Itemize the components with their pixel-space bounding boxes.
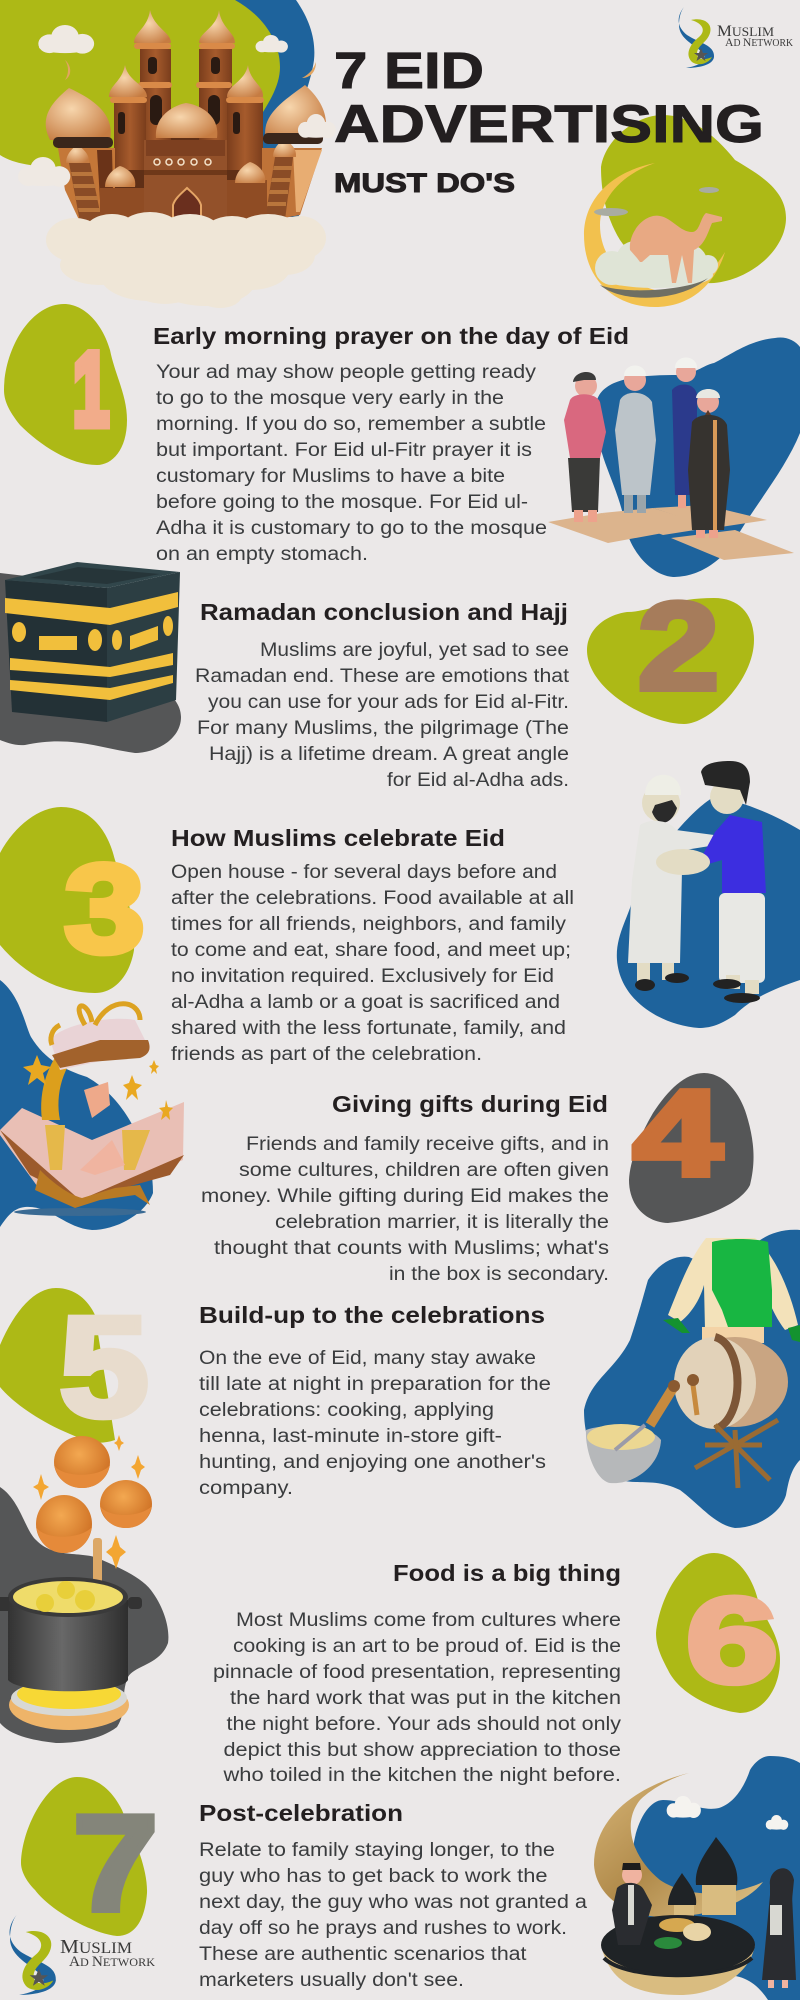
- logo: bottom left: AD NETWORK: [69, 1954, 155, 1970]
- blob: grey 6: [0, 1487, 168, 1743]
- body 5: On the eve of Eid, many stay awake: [199, 1348, 536, 1369]
- logo: top right: AD NETWORK: [725, 35, 794, 49]
- section 7: [10, 1756, 800, 2000]
- striped columns: [69, 157, 293, 222]
- body 7: These are authentic scenarios that: [199, 1944, 527, 1965]
- burner: [9, 1680, 129, 1730]
- illustration: camel on crescent moon: [584, 163, 725, 307]
- body 6: cooking is an art to be proud of. Eid is the: [233, 1636, 621, 1657]
- blob: blue 3: [617, 797, 800, 1028]
- blob: green 7: [21, 1777, 147, 1936]
- section 4: [0, 980, 754, 1285]
- crescent: [41, 1035, 85, 1120]
- body 3: Open house - for several days before and: [171, 862, 557, 883]
- heading 6: Food is a big thing: [393, 1560, 621, 1586]
- header blob: green: [0, 0, 280, 190]
- clouds: [667, 1796, 788, 1830]
- body 2: Hajj) is a lifetime dream. A great angle: [209, 744, 569, 765]
- body 2: Ramadan end. These are emotions that: [195, 666, 570, 687]
- body 3: after the celebrations. Food available at all: [171, 888, 574, 909]
- body 1: morning. If you do so, remember a subtle: [156, 414, 546, 435]
- body 7: [199, 1840, 587, 1991]
- heading 1: Early morning prayer on the day of Eid: [153, 323, 629, 349]
- body 6: who toiled in the kitchen the night before.: [222, 1765, 621, 1786]
- illustration: drum, garment and bowl: [586, 1238, 800, 1488]
- blob: green 5: [0, 1288, 115, 1443]
- body 4: Friends and family receive gifts, and in: [246, 1134, 609, 1155]
- lid: [50, 1019, 150, 1070]
- blob: grey 2: [0, 573, 181, 753]
- body 5: hunting, and enjoying one another's: [199, 1452, 546, 1473]
- heading 7: Post-celebration: [199, 1800, 403, 1826]
- title: ADVERTISING: [334, 95, 764, 154]
- minarets: [45, 1125, 150, 1170]
- heading 4: Giving gifts during Eid: [332, 1091, 608, 1117]
- man in blue: [700, 761, 766, 1003]
- body 3: to come and eat, share food, and meet up;: [171, 940, 571, 961]
- centre block: [144, 140, 227, 230]
- illustration: food pot and buns: [0, 1435, 152, 1730]
- lower wings: [100, 180, 267, 228]
- logo: top right: MUSLIM: [717, 23, 774, 40]
- illustration: people praying: [548, 358, 794, 560]
- body 3: shared with the less fortunate, family, and: [171, 1018, 566, 1039]
- illustration: two men greeting: [628, 761, 766, 1003]
- small gift: [84, 1082, 110, 1118]
- body 5: till late at night in preparation for the: [199, 1374, 551, 1395]
- body 7: Relate to family staying longer, to the: [199, 1840, 555, 1861]
- standing woman: [762, 1868, 796, 1988]
- title: 7 EID: [334, 42, 484, 99]
- body 2: for Eid al-Adha ads.: [387, 770, 569, 791]
- cloud base: [46, 212, 326, 308]
- section 1: [4, 304, 800, 577]
- section 3: [0, 761, 800, 1065]
- logo: bottom left: MUSLIM: [60, 1936, 132, 1958]
- bow: [51, 1004, 140, 1045]
- number 2: 2: [638, 578, 719, 716]
- body 1: customary for Muslims to have a bite: [156, 466, 505, 487]
- table: [601, 1945, 755, 1995]
- body 1: Your ad may show people getting ready: [156, 362, 537, 383]
- drum: [682, 1337, 788, 1427]
- body 4: celebration marrier, it is literally the: [275, 1212, 609, 1233]
- seated man: [612, 1863, 652, 1945]
- body 7: marketers usually don't see.: [199, 1970, 464, 1991]
- garment: [668, 1238, 798, 1330]
- illustration: gift box with crescent: [0, 1004, 184, 1216]
- blob: blue 4: [0, 980, 153, 1230]
- person: black robe: [688, 389, 730, 538]
- body 6: depict this but show appreciation to those: [224, 1740, 621, 1761]
- body 3: no invitation required. Exclusively for Eid: [171, 966, 554, 987]
- body 3: friends as part of the celebration.: [171, 1044, 482, 1065]
- stars: [23, 1055, 173, 1120]
- body 4: thought that counts with Muslims; what's: [214, 1238, 609, 1259]
- body 1: before going to the mosque. For Eid ul-: [156, 492, 528, 513]
- body 5: company.: [199, 1478, 293, 1499]
- section 6: [0, 1435, 780, 1786]
- body 5: [199, 1348, 551, 1499]
- section 5: [0, 1230, 800, 1528]
- body 2: you can use for your ads for Eid al-Fitr.: [208, 692, 569, 713]
- body 4: [201, 1134, 609, 1285]
- pot: [8, 1600, 128, 1691]
- body 6: [213, 1610, 622, 1786]
- crescents: [65, 60, 316, 80]
- backing mass: [115, 110, 263, 190]
- illustration: crescent, family and table: [594, 1773, 796, 1995]
- side wings: [58, 148, 115, 222]
- blob: green 3: [0, 807, 134, 993]
- person: grey robe: [615, 366, 656, 513]
- number 3: 3: [64, 838, 145, 979]
- sparkles: [33, 1435, 145, 1569]
- person: pink jacket: [564, 372, 606, 522]
- body 6: the night before. Your ads should not only: [226, 1714, 622, 1735]
- blob: blue 7: [633, 1756, 800, 2000]
- body 7: next day, the guy who was not granted a: [199, 1892, 587, 1913]
- blob: blue 1: [596, 337, 800, 577]
- body 5: celebrations: cooking, applying: [199, 1400, 494, 1421]
- number 1: 1: [73, 332, 109, 448]
- body 4: in the box is secondary.: [389, 1264, 609, 1285]
- number 5: 5: [59, 1288, 149, 1447]
- body 4: money. While gifting during Eid makes the: [201, 1186, 609, 1207]
- heading 2: Ramadan conclusion and Hajj: [200, 599, 568, 625]
- blob: blue 5: [584, 1230, 800, 1528]
- logo: top right: [679, 7, 794, 68]
- body 3: [171, 862, 574, 1065]
- body 3: al-Adha a lamb or a goat is sacrificed and: [171, 992, 560, 1013]
- title: [334, 42, 764, 198]
- person: navy suit: [672, 358, 697, 508]
- open box: [0, 1102, 184, 1200]
- towers: [702, 1885, 736, 1915]
- buns: [36, 1436, 152, 1553]
- number 7: 7: [73, 1787, 158, 1939]
- blob: green 1: [4, 304, 127, 465]
- tower domes: [46, 10, 326, 140]
- bowl: [586, 1426, 661, 1483]
- body 6: the hard work that was put in the kitchen: [230, 1688, 621, 1709]
- small clouds: [18, 25, 336, 187]
- body 2: [195, 640, 570, 791]
- heading 5: Build-up to the celebrations: [199, 1302, 545, 1328]
- crescent: [594, 1773, 763, 1917]
- drumsticks: [650, 1385, 697, 1425]
- body 6: pinnacle of food presentation, representing: [213, 1662, 621, 1683]
- dishes: [659, 1918, 695, 1932]
- blob: grey 4: [629, 1073, 754, 1223]
- title: MUST DO'S: [334, 168, 515, 198]
- body 1: [156, 362, 547, 565]
- tall towers: [114, 49, 263, 170]
- body 1: Adha it is customary to go to the mosque: [156, 518, 547, 539]
- hands: [656, 849, 710, 875]
- illustration: Kaaba: [5, 562, 180, 722]
- body 1: but important. For Eid ul-Fitr prayer it is: [156, 440, 532, 461]
- body 4: some cultures, children are often given: [239, 1160, 609, 1181]
- number 4: 4: [633, 1065, 722, 1201]
- body 1: to go to the mosque very early in the: [156, 388, 504, 409]
- body 5: henna, last-minute in-store gift-: [199, 1426, 502, 1447]
- spoon: [93, 1538, 102, 1590]
- body 2: Muslims are joyful, yet sad to see: [260, 640, 569, 661]
- body 7: guy who has to get back to work the: [199, 1866, 548, 1887]
- logo: bottom left: [10, 1915, 155, 1995]
- header blob: blue: [230, 0, 314, 217]
- body 7: day off so he prays and rushes to work.: [199, 1918, 567, 1939]
- number 6: 6: [686, 1572, 778, 1708]
- section 2: [0, 562, 754, 791]
- man in white: [628, 775, 716, 991]
- body 1: on an empty stomach.: [156, 544, 368, 565]
- blob: green 6: [656, 1553, 780, 1713]
- body 6: Most Muslims come from cultures where: [236, 1610, 621, 1631]
- drum stand: [695, 1420, 778, 1488]
- illustration: mosque on a cloud: [18, 10, 336, 308]
- body 3: times for all friends, neighbors, and family: [171, 914, 567, 935]
- header blob: green right: [601, 115, 786, 283]
- body 2: For many Muslims, the pilgrimage (The: [197, 718, 569, 739]
- heading 3: How Muslims celebrate Eid: [171, 825, 505, 851]
- blob: green 2: [587, 598, 754, 724]
